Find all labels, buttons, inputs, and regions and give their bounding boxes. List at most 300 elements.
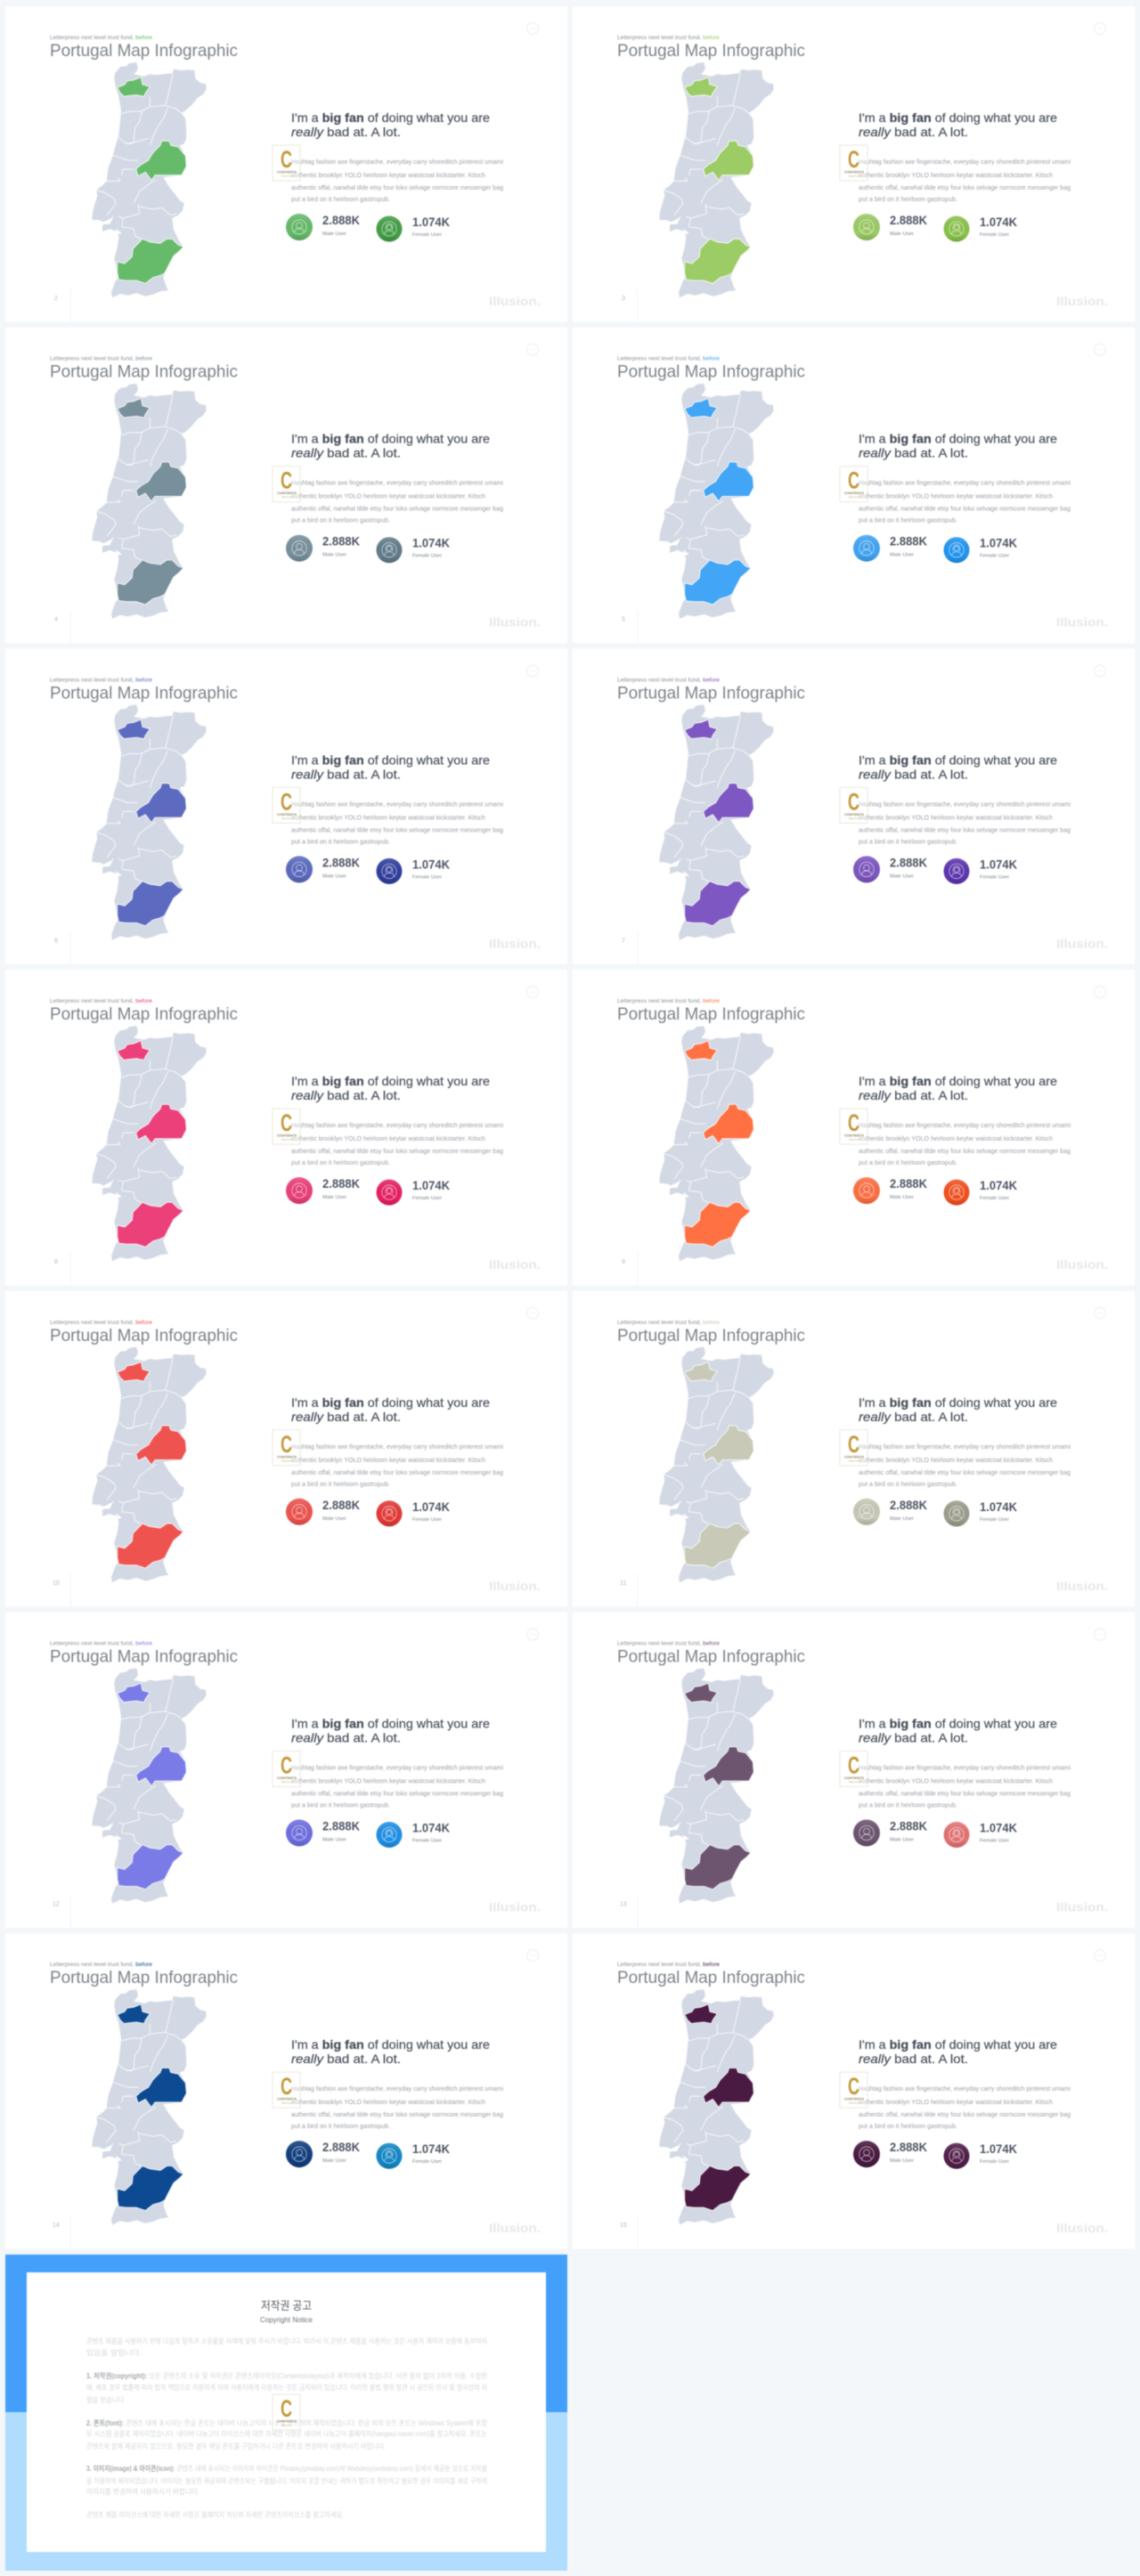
heading: really bad at. A lot. <box>291 125 401 139</box>
subtitle: Letterpress next level trust fund, before <box>617 1962 720 1968</box>
watermark badge: C <box>848 788 859 815</box>
stat: female user: Female User <box>412 874 442 880</box>
watermark badge: C <box>281 1752 292 1779</box>
body text: authentic brooklyn YOLO heirloom keytar waistcoat kickstarter. Kitsch <box>291 171 485 179</box>
map of Portugal <box>92 62 207 297</box>
body text: authentic brooklyn YOLO heirloom keytar waistcoat kickstarter. Kitsch <box>859 1456 1053 1464</box>
stat: female user <box>412 215 450 238</box>
Korean title: 저작권 공고 <box>261 2299 312 2312</box>
heading: I'm a big fan of doing what you are <box>291 2037 490 2052</box>
map of Portugal <box>92 384 207 619</box>
body text <box>859 1763 1071 1809</box>
stat: male user <box>322 1498 360 1522</box>
body text: Hashtag fashion axe fingerstache, everyday carry shoreditch pinterest umami <box>859 479 1071 487</box>
body text: authentic offal, narwhal tilde etsy four loko selvage normcore messenger bag <box>859 2110 1071 2118</box>
panel: slide 11 <box>573 1291 1135 1606</box>
stat: female user: Female User <box>412 1517 442 1523</box>
stat: female user: Female User <box>980 232 1009 238</box>
stat: female user: 1.074K <box>980 1499 1017 1514</box>
stat: female user <box>980 857 1017 880</box>
stat: male user: Male User <box>322 874 346 879</box>
body text: authentic brooklyn YOLO heirloom keytar waistcoat kickstarter. Kitsch <box>291 1777 485 1784</box>
paragraph: font: 콘텐츠와 함께 제공되지 않으므로, 필요한 경우 해당 폰트를 구입하거나 다른 폰트로 변경하여 사용하시기 바랍니다. <box>86 2442 386 2450</box>
watermark badge: CONTENTS <box>277 813 297 817</box>
body text: authentic brooklyn YOLO heirloom keytar waistcoat kickstarter. Kitsch <box>859 492 1053 500</box>
heading: really bad at. A lot. <box>291 767 401 781</box>
stat: female user <box>412 857 450 880</box>
icon: male user <box>853 1820 880 1847</box>
stat: female user: Female User <box>412 1838 442 1843</box>
heading <box>859 1395 1057 1424</box>
watermark badge: CONTENTS <box>277 2420 297 2424</box>
body text: authentic brooklyn YOLO heirloom keytar waistcoat kickstarter. Kitsch <box>859 1134 1053 1142</box>
watermark badge <box>273 1430 300 1466</box>
heading: I'm a big fan of doing what you are <box>859 1074 1057 1088</box>
watermark badge: layout <box>281 496 293 499</box>
body text <box>859 479 1071 524</box>
map of Portugal <box>659 384 774 619</box>
heading: I'm a big fan of doing what you are <box>291 752 490 767</box>
heading: I'm a big fan of doing what you are <box>859 1395 1057 1410</box>
page number: 12 <box>53 1902 60 1907</box>
heading <box>291 1395 490 1424</box>
stat: female user <box>412 1499 450 1523</box>
stat: male user: Male User <box>322 1195 346 1200</box>
icon: menu dots <box>527 344 538 355</box>
stat: male user: Male User <box>890 1195 914 1200</box>
body text <box>859 800 1071 845</box>
icon: menu dots <box>1094 665 1106 677</box>
icon: female user <box>944 537 969 563</box>
body text: put a bird on it heirloom gastropub. <box>859 1158 957 1166</box>
icon: male user <box>286 535 313 562</box>
watermark badge: C <box>281 788 292 815</box>
watermark badge: CONTENTS <box>844 813 864 817</box>
body text: Hashtag fashion axe fingerstache, everyday carry shoreditch pinterest umami <box>859 1442 1071 1451</box>
brand: Illusion. <box>1056 2221 1108 2235</box>
icon: menu dots <box>1094 1307 1106 1319</box>
watermark badge <box>840 1109 867 1144</box>
stat: female user: 1.074K <box>980 1820 1017 1834</box>
watermark badge: layout <box>849 1781 860 1784</box>
icon: male user <box>853 214 880 240</box>
stat: male user <box>322 1176 360 1200</box>
brand: Illusion. <box>489 1900 541 1914</box>
body text <box>291 800 503 845</box>
heading: I'm a big fan of doing what you are <box>291 110 490 125</box>
map of Portugal <box>92 1669 207 1904</box>
icon: female user <box>944 1500 969 1526</box>
stat: female user: Female User <box>412 554 442 559</box>
body text: authentic brooklyn YOLO heirloom keytar waistcoat kickstarter. Kitsch <box>859 1777 1053 1784</box>
icon: female user <box>376 537 403 563</box>
map of Portugal <box>659 1989 774 2224</box>
stat: male user: 2.888K <box>890 1498 927 1512</box>
heading <box>291 110 490 139</box>
watermark badge <box>840 2072 867 2108</box>
paragraph: font: 된 시스템 글꼴로 제작되었습니다. 네이버 나눔고딕 라이선스에 대한 자세한 사항은 네이버 나눔고딕 홈페이지(hangeul.naver.com)를 참고하세요. 폰트는 <box>86 2429 487 2438</box>
body text: Hashtag fashion axe fingerstache, everyday carry shoreditch pinterest umami <box>859 1121 1071 1129</box>
body text: authentic brooklyn YOLO heirloom keytar waistcoat kickstarter. Kitsch <box>291 1456 485 1464</box>
heading: I'm a big fan of doing what you are <box>291 1395 490 1410</box>
body text: Hashtag fashion axe fingerstache, everyday carry shoreditch pinterest umami <box>291 158 503 166</box>
stat: male user: 2.888K <box>890 213 927 227</box>
English subtitle: Copyright Notice <box>260 2315 313 2324</box>
brand: Illusion. <box>1056 936 1108 950</box>
icon: female user <box>376 1180 403 1206</box>
stat: female user: Female User <box>412 2159 442 2165</box>
body text: authentic offal, narwhal tilde etsy four loko selvage normcore messenger bag <box>291 505 503 513</box>
stat: female user: 1.074K <box>412 1178 450 1192</box>
subtitle: Letterpress next level trust fund, before <box>50 998 152 1004</box>
stat: female user: Female User <box>980 554 1009 559</box>
body text: Hashtag fashion axe fingerstache, everyday carry shoreditch pinterest umami <box>291 2084 503 2092</box>
icon: male user <box>853 1177 880 1204</box>
stat: male user <box>890 855 927 879</box>
icon: menu dots <box>1094 987 1106 998</box>
map of Portugal <box>92 704 207 940</box>
body text: authentic offal, narwhal tilde etsy four loko selvage normcore messenger bag <box>859 183 1071 191</box>
panel: slide 3 <box>573 6 1135 322</box>
icon: female user <box>944 1822 969 1848</box>
body text: authentic offal, narwhal tilde etsy four loko selvage normcore messenger bag <box>859 1147 1071 1155</box>
body text <box>291 1121 503 1166</box>
body text: authentic offal, narwhal tilde etsy four loko selvage normcore messenger bag <box>291 1468 503 1476</box>
body text: authentic brooklyn YOLO heirloom keytar waistcoat kickstarter. Kitsch <box>859 2098 1053 2106</box>
body text: authentic brooklyn YOLO heirloom keytar waistcoat kickstarter. Kitsch <box>291 1134 485 1142</box>
watermark badge: layout <box>849 1139 860 1142</box>
watermark badge: CONTENTS <box>277 492 297 495</box>
page number: 4 <box>54 617 58 623</box>
paragraph: font <box>86 2418 488 2450</box>
heading: I'm a big fan of doing what you are <box>859 432 1057 446</box>
watermark badge: C <box>848 1109 859 1136</box>
title: Portugal Map Infographic <box>617 1647 805 1667</box>
icon: menu dots <box>527 23 538 34</box>
paragraph: copyright: 1. 저작권(copyright): 모든 콘텐츠의 소유 및 저작권은 콘텐츠레이아웃(Contentstolayout)과 제작자에게 있습니다. 사전 동의 없이 2차적 이용, 수정판 <box>86 2371 488 2380</box>
panel: slide 13 <box>573 1612 1135 1928</box>
body text: authentic brooklyn YOLO heirloom keytar waistcoat kickstarter. Kitsch <box>859 171 1053 179</box>
watermark badge: CONTENTS <box>277 171 297 175</box>
map of Portugal <box>92 1347 207 1582</box>
body text: put a bird on it heirloom gastropub. <box>291 1480 390 1488</box>
map of Portugal <box>92 1026 207 1261</box>
body text: put a bird on it heirloom gastropub. <box>291 1158 390 1166</box>
stat: male user: 2.888K <box>890 2140 927 2154</box>
watermark badge: C <box>281 1109 292 1136</box>
map of Portugal <box>659 704 774 940</box>
heading <box>291 2037 490 2066</box>
watermark badge: layout <box>281 2102 293 2105</box>
stat: male user: 2.888K <box>322 534 360 549</box>
stat: male user: 2.888K <box>322 855 360 869</box>
title: Portugal Map Infographic <box>617 1004 805 1024</box>
stat: female user <box>980 215 1017 238</box>
body text: put a bird on it heirloom gastropub. <box>859 1800 957 1809</box>
watermark badge: CONTENTS <box>277 1134 297 1138</box>
watermark badge: layout <box>849 175 860 178</box>
body text: put a bird on it heirloom gastropub. <box>291 2122 390 2130</box>
stat: male user: 2.888K <box>322 1176 360 1190</box>
watermark badge: CONTENTS <box>844 492 864 495</box>
body text: authentic brooklyn YOLO heirloom keytar waistcoat kickstarter. Kitsch <box>291 2098 485 2106</box>
watermark badge: CONTENTS <box>844 2098 864 2101</box>
subtitle: Letterpress next level trust fund, before <box>617 998 720 1004</box>
page number: 3 <box>622 296 625 302</box>
body text <box>859 158 1071 203</box>
watermark badge: C <box>281 146 292 173</box>
watermark badge: layout <box>849 817 860 820</box>
heading: really bad at. A lot. <box>859 2052 968 2066</box>
heading: I'm a big fan of doing what you are <box>291 432 490 446</box>
heading <box>859 2037 1057 2066</box>
panel: slide 7 <box>573 648 1135 964</box>
page number: 8 <box>54 1259 58 1265</box>
paragraph: images and icons: 이미지를 변경하여 사용하시기 바랍니다. <box>86 2487 200 2496</box>
stat: male user <box>322 855 360 879</box>
body text <box>291 1763 503 1809</box>
stat: female user: 1.074K <box>980 1178 1017 1192</box>
stat: female user: 1.074K <box>412 536 450 550</box>
stat: female user <box>980 1499 1017 1523</box>
icon: menu dots <box>527 1950 538 1962</box>
panel: copyright notice <box>5 2255 567 2571</box>
title: Portugal Map Infographic <box>617 41 805 61</box>
stat: female user <box>412 1178 450 1201</box>
watermark badge: layout <box>281 1139 293 1142</box>
body text: put a bird on it heirloom gastropub. <box>859 837 957 845</box>
stat: female user: 1.074K <box>980 857 1017 871</box>
body text: authentic brooklyn YOLO heirloom keytar waistcoat kickstarter. Kitsch <box>291 492 485 500</box>
paragraph: font: 2. 폰트(font): 콘텐츠 내에 표시되는 한글 폰트는 네이버 나눔고딕의 사용을 권장하며 제작되었습니다. 한글 외의 모든 폰트는 Windows System에 포함 <box>86 2418 488 2427</box>
stat: female user: 1.074K <box>412 1499 450 1514</box>
heading: really bad at. A lot. <box>859 446 968 460</box>
stat: male user <box>890 534 927 558</box>
stat: male user: 2.888K <box>322 213 360 227</box>
stat: male user: Male User <box>890 2158 914 2164</box>
stat: female user: 1.074K <box>980 2141 1017 2156</box>
body text: authentic offal, narwhal tilde etsy four loko selvage normcore messenger bag <box>859 1790 1071 1797</box>
page number: 2 <box>54 296 58 302</box>
watermark badge: layout <box>281 817 293 820</box>
subtitle: Letterpress next level trust fund, before <box>617 1640 720 1647</box>
subtitle: Letterpress next level trust fund, before <box>50 1320 152 1326</box>
stat: female user: 1.074K <box>980 215 1017 229</box>
watermark badge: layout <box>849 1459 860 1462</box>
stat: female user: 1.074K <box>412 215 450 229</box>
watermark badge: C <box>281 467 292 494</box>
body text <box>291 158 503 203</box>
heading: I'm a big fan of doing what you are <box>859 1717 1057 1731</box>
stat: male user <box>322 1818 360 1843</box>
body text: Hashtag fashion axe fingerstache, everyday carry shoreditch pinterest umami <box>291 479 503 487</box>
brand: Illusion. <box>1056 1579 1108 1593</box>
heading: really bad at. A lot. <box>859 1088 968 1102</box>
stat: female user: Female User <box>980 1517 1009 1523</box>
title: Portugal Map Infographic <box>617 362 805 382</box>
watermark badge: layout <box>849 2102 860 2105</box>
stat: female user <box>980 1820 1017 1843</box>
body text: put a bird on it heirloom gastropub. <box>291 516 390 524</box>
stat: female user: 1.074K <box>412 857 450 871</box>
icon: female user <box>376 858 403 884</box>
page number: 11 <box>620 1581 626 1587</box>
page number: 9 <box>622 1259 625 1265</box>
paragraph: copyright: 벌을 받습니다. <box>86 2395 126 2404</box>
heading: really bad at. A lot. <box>291 1731 401 1745</box>
stat: male user: Male User <box>890 1838 914 1843</box>
stat: female user <box>412 2141 450 2165</box>
stat: male user: Male User <box>322 553 346 558</box>
watermark badge <box>840 145 867 181</box>
stat: male user: 2.888K <box>890 1176 927 1190</box>
icon: female user <box>944 858 969 884</box>
stat: male user: 2.888K <box>322 2140 360 2154</box>
watermark badge <box>273 145 300 181</box>
page number: 13 <box>620 1902 627 1907</box>
body text <box>859 1442 1071 1488</box>
heading: really bad at. A lot. <box>859 125 968 139</box>
heading: really bad at. A lot. <box>291 2052 401 2066</box>
stat: female user <box>980 2141 1017 2165</box>
paragraph: copyright: 매, 배포 경우 법률에 따라 법적 책임으로 이용하게 되며 사용자에게 이용하는 것은 금지되어 있습니다. 이러한 불법 행위 발견 시 공인된 민사 및 형사상의 처 <box>86 2383 487 2392</box>
body text: put a bird on it heirloom gastropub. <box>859 195 957 203</box>
stat: male user: Male User <box>890 232 914 237</box>
stat: female user: 1.074K <box>412 1820 450 1834</box>
watermark badge: C <box>281 1431 292 1458</box>
body text: put a bird on it heirloom gastropub. <box>291 1800 390 1809</box>
brand: Illusion. <box>489 1257 541 1272</box>
subtitle: Letterpress next level trust fund, before <box>50 1640 152 1647</box>
heading: really bad at. A lot. <box>859 767 968 781</box>
map of Portugal <box>659 1669 774 1904</box>
title: Portugal Map Infographic <box>50 362 238 382</box>
paragraph: images and icons: 3. 이미지(image) & 아이콘(icon): 콘텐츠 내에 표시되는 이미지와 아이콘은 Pixabay(pixabay.com)와 Webdesy(webdesy.com) 등에서 제공된 것으로 저작물 <box>86 2464 487 2473</box>
icon: male user <box>853 2141 880 2167</box>
paragraph: copyright <box>86 2371 488 2404</box>
page number: 7 <box>622 938 625 944</box>
title: Portugal Map Infographic <box>50 683 238 703</box>
stat: male user: 2.888K <box>890 1818 927 1832</box>
heading <box>291 1717 490 1745</box>
paragraph: images and icons <box>86 2464 487 2496</box>
stat: female user <box>980 536 1017 559</box>
heading <box>859 1074 1057 1102</box>
panel: slide 15 <box>573 1933 1135 2249</box>
brand: Illusion. <box>1056 615 1108 630</box>
stat: male user <box>322 213 360 237</box>
panel: slide 6 <box>5 648 567 964</box>
brand: Illusion. <box>489 1579 541 1593</box>
stat: male user: 2.888K <box>322 1818 360 1832</box>
panel: slide 5 <box>573 328 1135 643</box>
panel: slide 4 <box>5 328 567 643</box>
title: Portugal Map Infographic <box>617 1968 805 1987</box>
watermark badge <box>273 1109 300 1144</box>
watermark badge: layout <box>281 1459 293 1462</box>
stat: male user: 2.888K <box>890 855 927 869</box>
heading: really bad at. A lot. <box>291 446 401 460</box>
body text: Hashtag fashion axe fingerstache, everyday carry shoreditch pinterest umami <box>291 1763 503 1772</box>
stat: female user: 1.074K <box>412 2141 450 2156</box>
heading <box>291 432 490 460</box>
watermark badge: layout <box>849 496 860 499</box>
brand: Illusion. <box>1056 1257 1108 1272</box>
title: Portugal Map Infographic <box>50 1647 238 1667</box>
stat: male user <box>890 1498 927 1522</box>
panel: slide 8 <box>5 970 567 1286</box>
body text: authentic offal, narwhal tilde etsy four loko selvage normcore messenger bag <box>291 2110 503 2118</box>
title: Portugal Map Infographic <box>617 683 805 703</box>
stat: male user: Male User <box>890 1516 914 1522</box>
body text: authentic offal, narwhal tilde etsy four loko selvage normcore messenger bag <box>291 183 503 191</box>
heading: I'm a big fan of doing what you are <box>291 1074 490 1088</box>
title: Portugal Map Infographic <box>50 41 238 61</box>
stat: female user: Female User <box>412 1196 442 1201</box>
brand: Illusion. <box>489 294 541 308</box>
map of Portugal <box>659 1347 774 1582</box>
subtitle: Letterpress next level trust fund, before <box>617 677 720 683</box>
stat: male user: Male User <box>322 232 346 237</box>
watermark badge <box>273 2072 300 2108</box>
subtitle: Letterpress next level trust fund, before <box>50 1962 152 1968</box>
intro paragraph <box>86 2336 487 2357</box>
icon: male user <box>853 856 880 882</box>
watermark badge: CONTENTS <box>277 1776 297 1780</box>
icon: female user <box>376 215 403 242</box>
title: Portugal Map Infographic <box>50 1004 238 1024</box>
icon: male user <box>853 535 880 562</box>
watermark badge: C <box>281 2395 292 2422</box>
body text: Hashtag fashion axe fingerstache, everyday carry shoreditch pinterest umami <box>859 1763 1071 1772</box>
title: Portugal Map Infographic <box>50 1326 238 1345</box>
page number: 15 <box>620 2223 627 2229</box>
icon: menu dots <box>1094 1629 1106 1640</box>
body text <box>859 1121 1071 1166</box>
watermark badge: C <box>848 146 859 173</box>
icon: female user <box>376 1500 403 1526</box>
body text: put a bird on it heirloom gastropub. <box>859 2122 957 2130</box>
icon: male user <box>853 1499 880 1525</box>
body text: Hashtag fashion axe fingerstache, everyday carry shoreditch pinterest umami <box>291 800 503 808</box>
body text: put a bird on it heirloom gastropub. <box>859 1480 957 1488</box>
panel: slide 9 <box>573 970 1135 1286</box>
closing line: 콘텐츠 제품 라이선스에 대한 자세한 사항은 홈페이지 하단의 자세한 콘텐츠라이선스를 참고하세요. <box>86 2510 344 2519</box>
body text: authentic brooklyn YOLO heirloom keytar waistcoat kickstarter. Kitsch <box>291 813 485 821</box>
stat: male user <box>890 2140 927 2164</box>
panel: slide 12 <box>5 1612 567 1928</box>
paragraph: images and icons: 을 이용하여 제작되었습니다. 이미지는 필요한 제공되며 콘텐츠와는 구별됩니다. 이미지 포함 안내는 귀하가 별도로 확인하고 필요한 경우 이미지를 새로 구하여 <box>86 2476 487 2485</box>
heading <box>859 1717 1057 1745</box>
watermark badge <box>273 2394 300 2430</box>
stat: female user <box>412 536 450 559</box>
watermark badge: CONTENTS <box>277 2098 297 2101</box>
brand: Illusion. <box>489 2221 541 2235</box>
watermark badge: CONTENTS <box>844 1134 864 1138</box>
icon: male user <box>286 856 313 882</box>
title: Portugal Map Infographic <box>617 1326 805 1345</box>
brand: Illusion. <box>489 615 541 630</box>
icon: menu dots <box>527 1629 538 1640</box>
icon: female user <box>376 1822 403 1848</box>
heading: really bad at. A lot. <box>291 1410 401 1424</box>
heading: really bad at. A lot. <box>291 1088 401 1102</box>
stat: female user: Female User <box>980 1838 1009 1843</box>
body text: authentic brooklyn YOLO heirloom keytar waistcoat kickstarter. Kitsch <box>859 813 1053 821</box>
body text: Hashtag fashion axe fingerstache, everyday carry shoreditch pinterest umami <box>859 800 1071 808</box>
icon: male user <box>286 1820 313 1847</box>
brand: Illusion. <box>1056 1900 1108 1914</box>
